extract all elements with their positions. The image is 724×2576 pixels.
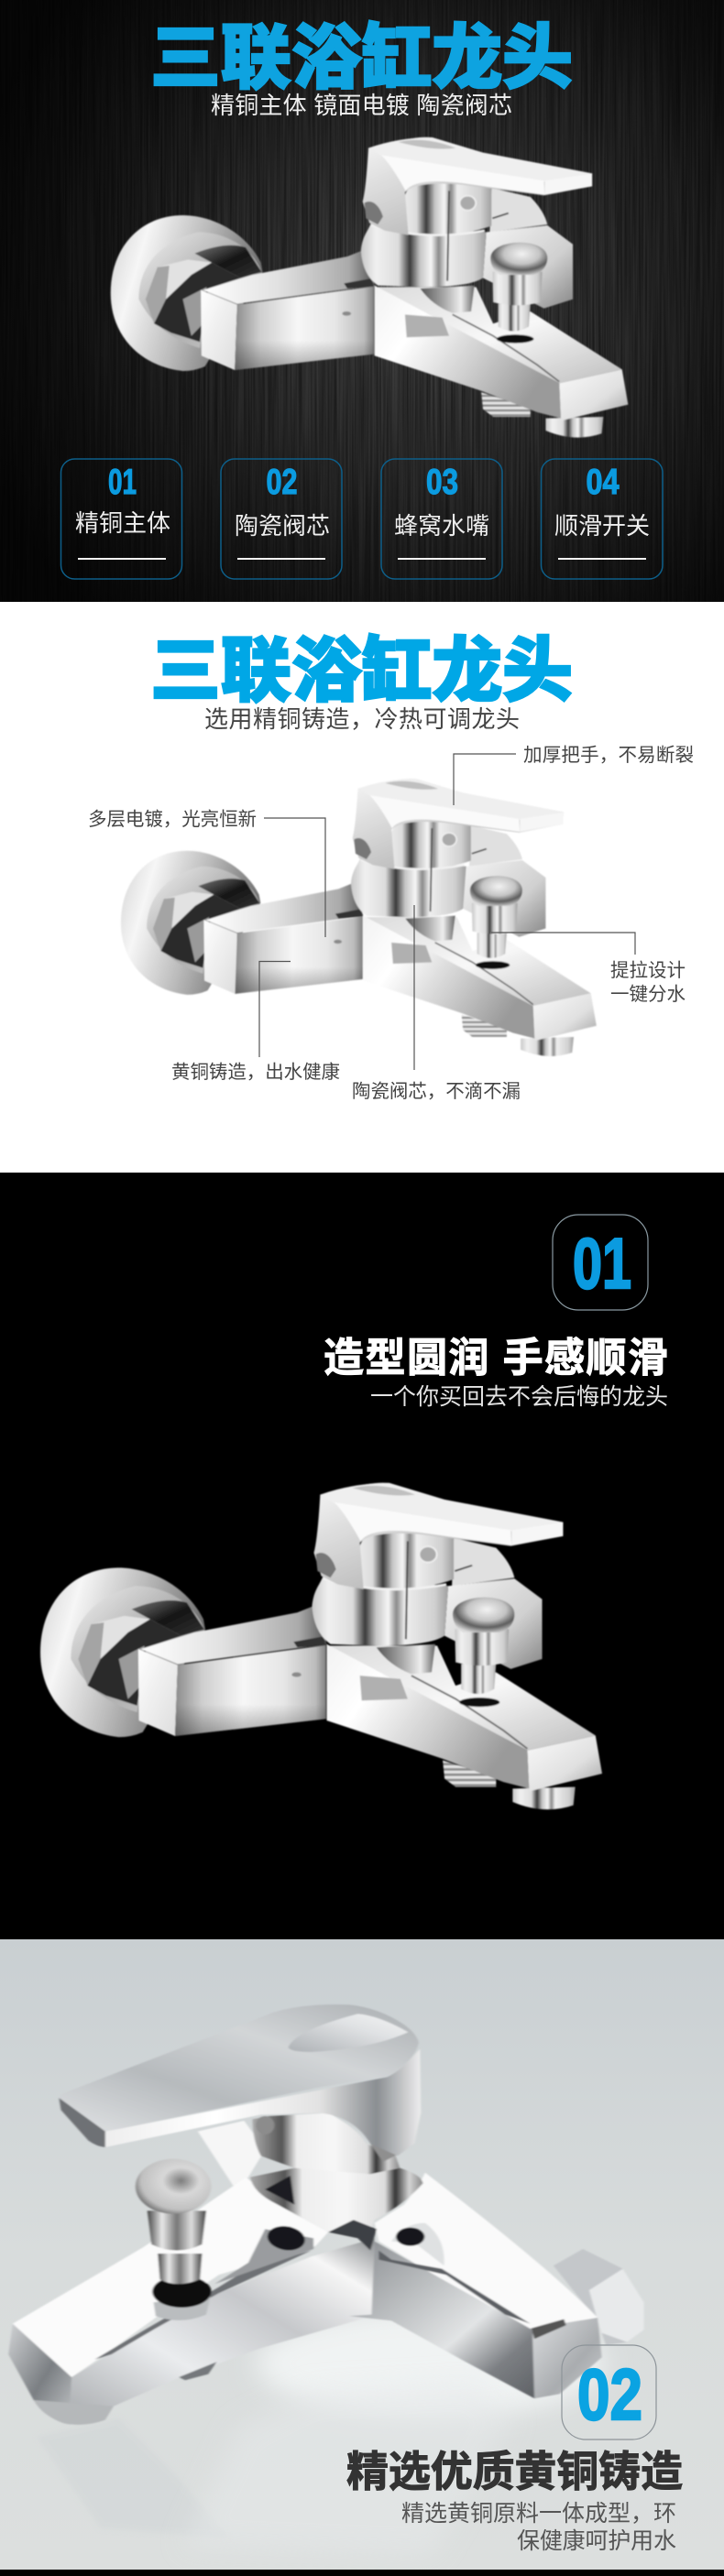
feature card 02 xyxy=(221,459,342,579)
feature card 04 xyxy=(541,459,663,579)
feature card 03 xyxy=(381,459,502,579)
subtitle: 选用精铜铸造，冷热可调龙头 xyxy=(204,705,520,733)
feature card 04: 顺滑开关 xyxy=(554,512,650,540)
footer strip xyxy=(0,2570,724,2576)
callout: plating xyxy=(88,809,325,937)
feature card 02: 02 xyxy=(266,463,297,502)
subheading: 保健康呵护用水 xyxy=(517,2528,676,2554)
feature card 01 xyxy=(60,459,181,579)
subtitle: 精铜主体 镜面电镀 陶瓷阀芯 xyxy=(211,92,512,119)
callout: pull lever: 一键分水 xyxy=(610,984,686,1005)
faucet photo xyxy=(121,779,597,1056)
panel: 01 rounded shape xyxy=(0,1173,724,1939)
faucet photo xyxy=(40,1483,602,1809)
feature card 04: 04 xyxy=(587,463,620,502)
feature card 01: 精铜主体 xyxy=(75,509,170,537)
title: 三联浴缸龙头 xyxy=(150,19,573,98)
subheading: 一个你买回去不会后悔的龙头 xyxy=(370,1384,668,1410)
number badge 02: 02 xyxy=(577,2353,642,2435)
feature card 01: 01 xyxy=(108,463,137,502)
callout: pull lever xyxy=(491,933,686,1005)
callout: handle xyxy=(454,745,694,805)
callout: pull lever: 提拉设计 xyxy=(610,960,686,981)
callout: brass casting: 黄铜铸造，出水健康 xyxy=(171,1062,340,1083)
title: 三联浴缸龙头 xyxy=(150,632,573,711)
subheading xyxy=(401,2501,676,2554)
callout: ceramic cartridge: 陶瓷阀芯，不滴不漏 xyxy=(352,1081,521,1102)
callout: handle: 加厚把手，不易断裂 xyxy=(523,745,694,766)
heading: 造型圆润 手感顺滑 xyxy=(324,1336,668,1381)
feature card 03: 03 xyxy=(426,463,458,502)
number badge 01 xyxy=(553,1215,648,1310)
subheading: 精选黄铜原料一体成型，环 xyxy=(401,2501,676,2527)
heading: 精选优质黄铜铸造 xyxy=(346,2448,683,2495)
panel: anatomy callouts xyxy=(0,602,724,1173)
panel: hero xyxy=(0,0,724,602)
number badge 01: 01 xyxy=(573,1223,631,1304)
panel: 02 brass casting xyxy=(0,1939,724,2576)
callout: brass casting xyxy=(171,962,340,1083)
close-up faucet photo xyxy=(8,2004,644,2425)
callout: plating: 多层电镀，光亮恒新 xyxy=(88,809,257,830)
feature card 02: 陶瓷阀芯 xyxy=(235,512,330,540)
faucet photo xyxy=(111,137,628,438)
feature card 03: 蜂窝水嘴 xyxy=(394,512,489,540)
